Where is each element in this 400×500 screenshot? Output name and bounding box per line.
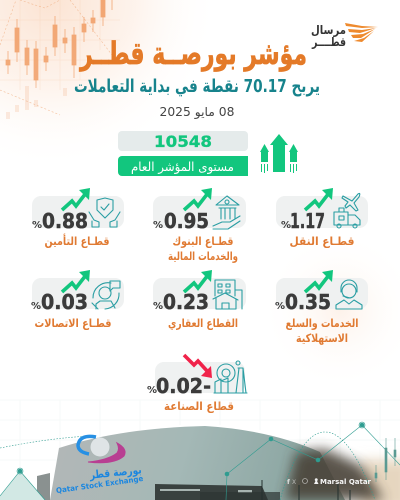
icon: up arrows <box>260 134 298 173</box>
percent: % <box>153 220 163 231</box>
label: قطـاع الاتصالات <box>34 316 112 330</box>
logo: Qatar Stock Exchange sign: بورصة قطر <box>88 463 142 482</box>
label: قطـاع النقل <box>290 234 354 248</box>
icon: bank on hand <box>213 196 240 229</box>
photo: stock exchange building <box>0 400 400 500</box>
panel: banks <box>153 188 246 264</box>
chart overlay on photo <box>0 422 400 500</box>
percent: % <box>32 220 42 231</box>
panel: transport <box>276 188 368 248</box>
panel: telecom <box>31 270 124 330</box>
date: 08 مايو 2025 <box>160 105 234 120</box>
label: قطاع الصناعة <box>164 399 234 413</box>
index label box <box>118 156 248 176</box>
percent: % <box>281 220 291 231</box>
value: 1.17 <box>290 209 325 233</box>
up arrow <box>184 188 212 210</box>
label: القطاع العقاري <box>168 316 238 330</box>
value: 0.23 <box>163 290 209 314</box>
percent: % <box>147 385 157 396</box>
label line 2: والخدمات المالية <box>168 249 238 264</box>
down arrow <box>184 355 212 378</box>
value: 0.02- <box>156 374 211 398</box>
panel: industry <box>147 355 247 413</box>
icon: truck and plane <box>334 193 360 228</box>
up arrow <box>184 270 212 292</box>
footer: social handle: X <box>292 479 296 486</box>
logo: Qatar Stock Exchange sign <box>55 436 144 495</box>
footer: social handle: Marsal Qatar <box>320 478 372 486</box>
label: الخدمات والسلع <box>286 316 358 331</box>
logo: Qatar Stock Exchange sign: Qatar Stock Exchange <box>55 474 144 495</box>
subtitle: يربح 70.17 نقطة في بداية التعاملات <box>74 76 320 97</box>
value: 0.88 <box>42 209 88 233</box>
value: 0.35 <box>285 290 331 314</box>
panel: insurance <box>32 188 124 248</box>
label: قطـاع التأمين <box>44 233 110 248</box>
logo: Marsal Qatar: قطــــر <box>311 35 346 49</box>
icon: buildings <box>213 280 242 309</box>
footer: social handle <box>287 478 372 486</box>
up arrow <box>305 270 333 292</box>
index value box <box>118 131 248 151</box>
icon: headset agent <box>336 280 362 309</box>
percent: % <box>153 301 163 312</box>
index label box: مستوى المؤشر العام <box>131 159 234 175</box>
up arrow <box>305 188 333 210</box>
panel: consumer services <box>275 270 368 345</box>
up arrow <box>62 270 90 292</box>
icon: factory <box>214 361 247 393</box>
up arrow <box>62 188 90 210</box>
label: قطـاع البنوك <box>172 234 234 249</box>
panel: real estate <box>153 270 246 330</box>
logo: Marsal Qatar: مرسال <box>311 23 346 37</box>
icon: call support <box>92 281 120 309</box>
value: 0.03 <box>41 290 88 314</box>
icon: shield in hands <box>89 198 120 227</box>
title: مؤشر بورصــة قطــر <box>79 36 307 72</box>
label line 2: الاستهلاكية <box>296 331 348 345</box>
logo: Marsal Qatar <box>311 23 378 49</box>
value: 0.95 <box>164 209 209 233</box>
index value box: 10548 <box>154 132 212 151</box>
percent: % <box>275 301 285 312</box>
percent: % <box>31 301 41 312</box>
footer: social handle: f <box>287 478 290 486</box>
